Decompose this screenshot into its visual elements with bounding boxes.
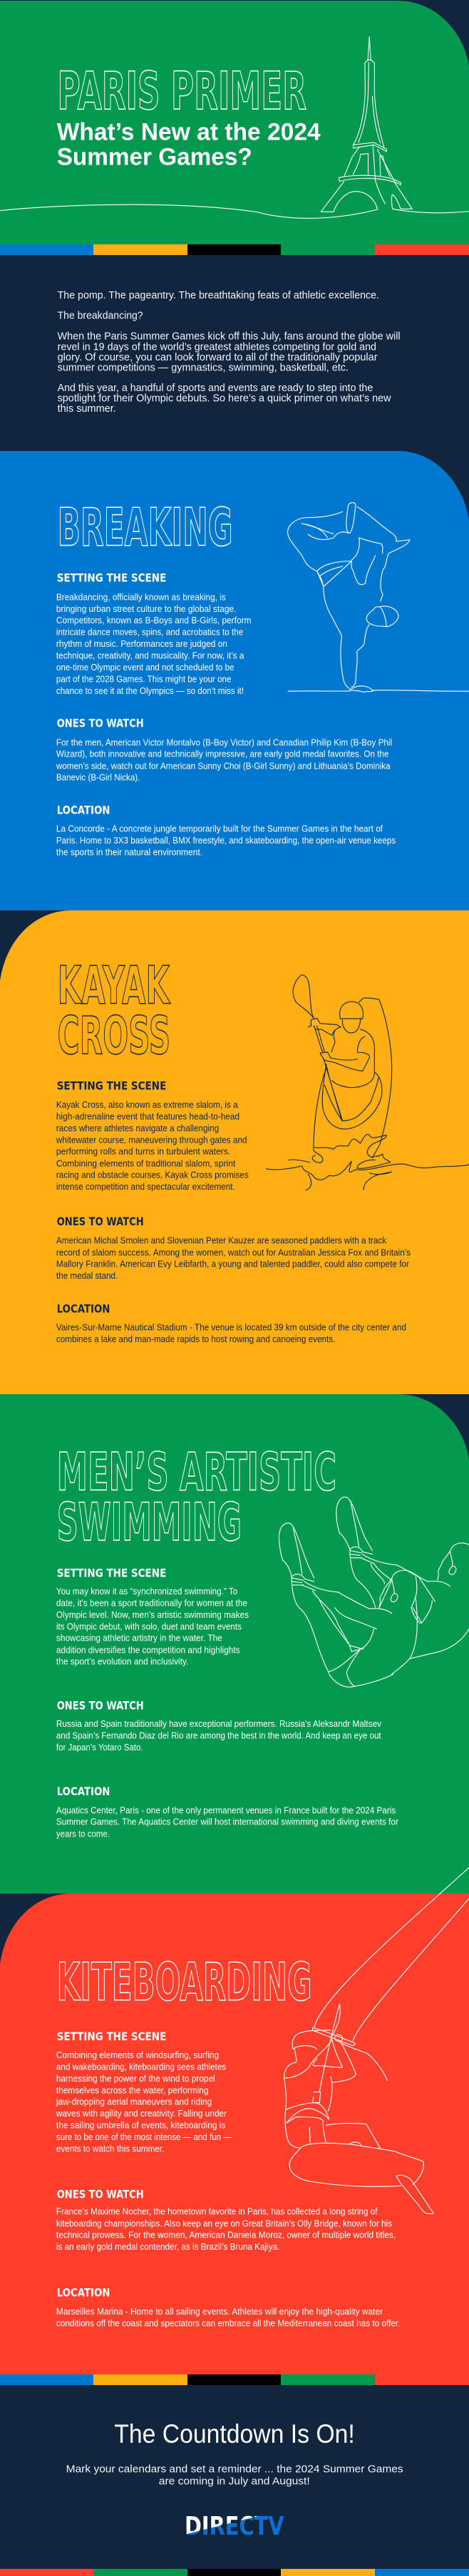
section: setting the scene: the sailing umbrella of events, kiteboarding is (56, 2120, 226, 2131)
section: location: combines a lake and man-made rapids to host rowing and canoeing events. (56, 1334, 335, 1344)
figure: rear swimmer (336, 1497, 469, 1608)
section: ones to watch: France’s Maxime Nocher, the hometown favorite in Paris, has collected a long string of (56, 2206, 378, 2217)
section: ones to watch: ONES TO WATCH (57, 1698, 144, 1712)
section: setting the scene: intense competition and spectacular excitement. (56, 1181, 235, 1192)
section: setting the scene (56, 1079, 249, 1192)
panel: header (0, 1, 469, 255)
section: location: LOCATION (57, 1302, 110, 1316)
section: location (56, 803, 396, 857)
logo: DirecTV: DIRECTV (185, 2512, 284, 2541)
panel: kayak cross (0, 910, 469, 1394)
section: location: the sports in their natural environment. (56, 846, 202, 857)
intro text: summer competitions — gymnastics, swimming, basketball, etc. (58, 361, 349, 373)
section: ones to watch: ONES TO WATCH (57, 717, 144, 730)
heading: Kayak Cross (58, 955, 170, 1066)
section: setting the scene: jaw-dropping aerial maneuvers and riding (56, 2097, 212, 2107)
color bars (0, 2374, 375, 2385)
intro text (58, 289, 401, 415)
heading: Men's Artistic Swimming (57, 1443, 336, 1553)
section: ones to watch: ONES TO WATCH (57, 1215, 144, 1228)
section: ones to watch: American Michal Smolen and Slovenian Peter Kauzer are seasoned paddlers with a track (56, 1235, 387, 1246)
section: setting the scene (56, 2030, 232, 2154)
subtitle: What’s New at the 2024 (57, 119, 321, 146)
section: location: Aquatics Center, Paris - one of the only permanent venues in France built for the 2024 Paris (56, 1804, 396, 1815)
section: ones to watch: Wizard), both innovative and technically impressive, are early gold medal favorites. On the (56, 749, 389, 759)
illustration: breakdancer (288, 502, 469, 692)
panel: footer (0, 2419, 469, 2576)
intro text: The pomp. The pageantry. The breathtaking feats of athletic excellence. (58, 289, 379, 301)
section: setting the scene: waves with agility and creativity. Falling under (56, 2108, 227, 2119)
subtitle (57, 119, 321, 171)
panel: kiteboarding (0, 1868, 469, 2385)
footer text (66, 2463, 403, 2487)
section: setting the scene: technique, creativity, and musicality. For now, it’s a (56, 650, 244, 661)
section: ones to watch (56, 1698, 381, 1752)
section: ones to watch: ONES TO WATCH (57, 2188, 144, 2201)
bottom color bars (0, 2569, 469, 2576)
intro text: spotlight for their Olympic debuts. So here’s a quick primer on what’s new (58, 393, 391, 405)
section: ones to watch: record of slalom success. Among the women, watch out for Australian Jessica Fox and Britain’s (56, 1247, 411, 1257)
section: setting the scene: SETTING THE SCENE (57, 1079, 166, 1092)
panel: breaking (0, 451, 469, 910)
intro text: The breakdancing? (58, 310, 143, 322)
section: ones to watch (56, 2188, 396, 2252)
section: ones to watch: Russia and Spain traditionally have exceptional performers. Russia’s Aleksandr Maltsev (56, 1718, 381, 1729)
illustration: kiteboarder (284, 1868, 469, 2214)
section: location: LOCATION (57, 1785, 110, 1798)
section: ones to watch (56, 1215, 411, 1281)
section: setting the scene: themselves across the water, performing (56, 2084, 209, 2095)
section: setting the scene: Competitors, known as B-Boys and B-Girls, perform (56, 615, 252, 625)
section: setting the scene: sure to be one of the most intense — and fun — (56, 2131, 232, 2142)
section: ones to watch: Banevic (B-Girl Nicka). (56, 772, 140, 783)
section: ones to watch: is an early gold medal contender, as is Brazil’s Bruna Kajiya. (56, 2241, 279, 2252)
section: location: Marseilles Marina - Home to all sailing events. Athletes will enjoy the high-quality water (56, 2306, 383, 2317)
section: setting the scene (56, 571, 252, 696)
section: setting the scene: part of the 2028 Games. This might be your one (56, 674, 231, 684)
section: location: La Concorde - A concrete jungle temporarily built for the Summer Games in the heart of (56, 823, 383, 833)
heading: The Countdown Is On!: The Countdown Is On! (114, 2419, 355, 2448)
section: ones to watch (56, 717, 392, 783)
section: location (56, 2285, 401, 2328)
footer text: are coming in July and August! (159, 2475, 310, 2487)
section: setting the scene: races where athletes navigate a challenging (56, 1123, 219, 1133)
section: setting the scene: Combining elements of traditional slalom, sprint (56, 1158, 236, 1168)
illustration: kayaker (266, 975, 469, 1190)
section: location (56, 1302, 406, 1344)
section: setting the scene: one-time Olympic event and not scheduled to be (56, 662, 234, 672)
intro text: And this year, a handful of sports and events are ready to step into the (58, 382, 373, 394)
section: ones to watch: Mallory Franklin. American Evy Leibfarth, a young and talented paddler, could also compete for (56, 1259, 410, 1269)
section: setting the scene: high-adrenaline event that features head-to-head (56, 1111, 239, 1121)
icon: Eiffel Tower line drawing (0, 37, 469, 218)
section: setting the scene: showcasing athletic artistry in the water. The (56, 1633, 222, 1643)
section: setting the scene: harnessing the power of the wind to propel (56, 2073, 215, 2084)
intro text: revel in 19 days of the world’s greatest athletes competing for gold and (58, 341, 376, 353)
section: location: years to come. (56, 1828, 110, 1839)
subtitle: Summer Games? (57, 144, 252, 171)
section: location: Paris. Home to 3X3 basketball, BMX freestyle, and skateboarding, the open-air venue keeps (56, 835, 396, 846)
intro text: this summer. (58, 402, 116, 415)
section: setting the scene: Combining elements of windsurfing, surfing (56, 2050, 219, 2060)
section: setting the scene: Kayak Cross, also known as extreme slalom, is a (56, 1099, 238, 1110)
section: ones to watch: technical prowess. For the women, American Daniela Moroz, owner of multiple world titles, (56, 2230, 396, 2240)
section: setting the scene: You may know it as “synchronized swimming.” To (56, 1586, 237, 1596)
section: setting the scene: SETTING THE SCENE (57, 2030, 166, 2043)
section: ones to watch: kiteboarding championships. Also keep an eye on Great Britain’s Olly Bridge, known for his (56, 2218, 393, 2228)
section: setting the scene: bringing urban street culture to the global stage. (56, 603, 237, 614)
section: setting the scene: intricate dance moves, spins, and acrobatics to the (56, 627, 243, 638)
section: ones to watch: For the men, American Victor Montalvo (B-Boy Victor) and Canadian Philip Kim (B-Boy Phil (56, 737, 392, 747)
section: setting the scene (56, 1566, 249, 1667)
section: ones to watch: and Spain’s Fernando Diaz del Rio are among the best in the world. And keep an eye out (56, 1730, 381, 1741)
panel: men's artistic swimming (0, 1394, 469, 1894)
heading: Breaking: BREAKING (58, 498, 233, 559)
section: setting the scene: chance to see it at the Olympics — so don’t miss it! (56, 685, 244, 696)
title: Paris Primer: PARIS PRIMER (57, 61, 306, 122)
section: location: LOCATION (57, 803, 110, 816)
section: setting the scene: and wakeboarding, kiteboarding sees athletes (56, 2061, 227, 2072)
section: setting the scene: its Olympic debut, with solo, duet and team events (56, 1621, 242, 1631)
section: ones to watch: women’s side, watch out for American Sunny Choi (B-Girl Sunny) and Lithuania’s Dominika (56, 760, 391, 771)
heading: Men's Artistic Swimming: SWIMMING (57, 1492, 242, 1553)
section: setting the scene: the sport’s evolution and inclusivity. (56, 1656, 188, 1667)
section: ones to watch: for Japan’s Yotaro Sato. (56, 1742, 143, 1752)
section: setting the scene: racing and obstacle courses, Kayak Cross promises (56, 1170, 249, 1180)
intro text: glory. Of course, you can look forward to all of the traditionally popular (58, 351, 378, 363)
section: setting the scene: addition diversifies the competition and highlights (56, 1644, 240, 1655)
footer text: Mark your calendars and set a reminder ... the 2024 Summer Games (66, 2463, 403, 2476)
section: location: Summer Games. The Aquatics Center will host international swimming and diving events for (56, 1817, 399, 1827)
section: ones to watch: the medal stand. (56, 1270, 118, 1281)
illustration: artistic swimmers (279, 1497, 469, 1687)
section: location: conditions off the coast and spectators can embrace all the Mediterranean coast has to offer. (56, 2317, 401, 2328)
section: location (56, 1785, 399, 1839)
section: setting the scene: whitewater course, maneuvering through gates and (56, 1134, 247, 1145)
section: setting the scene: SETTING THE SCENE (57, 571, 166, 585)
figure: front swimmer (279, 1523, 469, 1687)
heading: Kayak Cross: KAYAK (58, 955, 170, 1016)
section: setting the scene: date, it’s been a sport traditionally for women at the (56, 1598, 247, 1609)
section: setting the scene: SETTING THE SCENE (57, 1566, 166, 1579)
section: setting the scene: performing rolls and turns in turbulent waters. (56, 1146, 231, 1157)
color bars (0, 244, 469, 255)
section: location: LOCATION (57, 2285, 110, 2299)
section: setting the scene: events to watch this summer. (56, 2143, 164, 2154)
section: setting the scene: Breakdancing, officially known as breaking, is (56, 591, 226, 602)
section: location: Vaires-Sur-Marne Nautical Stadium - The venue is located 39 km outside of the city center and (56, 1322, 406, 1333)
heading: Kayak Cross: CROSS (58, 1006, 170, 1066)
section: setting the scene: rhythm of music. Performances are judged on (56, 638, 227, 649)
section: setting the scene: Olympic level. Now, men’s artistic swimming makes (56, 1609, 249, 1620)
intro text: When the Paris Summer Games kick off this July, fans around the globe will (58, 331, 401, 343)
